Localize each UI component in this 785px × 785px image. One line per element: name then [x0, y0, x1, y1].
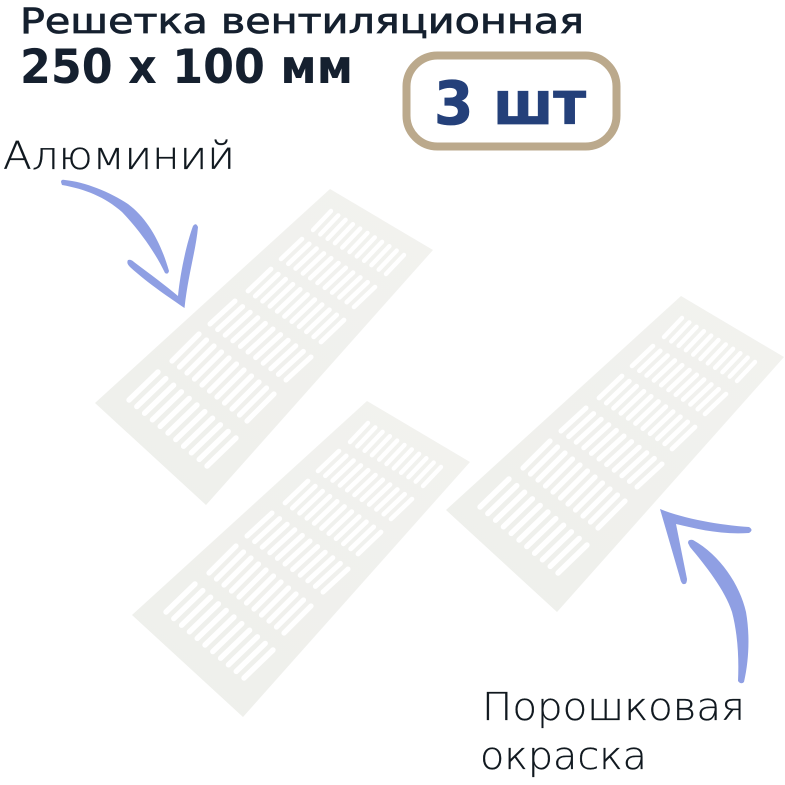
- label: coating second line: окраска: [480, 734, 647, 778]
- badge: quantity: [406, 56, 616, 146]
- grille: left upper: [95, 189, 433, 505]
- label: aluminium: Алюминий: [3, 134, 235, 178]
- label: powder coating: Порошковая: [482, 685, 745, 729]
- arrow: to left grille: [61, 180, 198, 308]
- grille: right: [446, 296, 784, 612]
- title: dimensions: 250 х 100 мм: [20, 40, 353, 95]
- arrow: to right grille: [660, 509, 752, 683]
- badge: quantity: 3 шт: [434, 69, 586, 139]
- title: product name: Решетка вентиляционная: [20, 2, 584, 42]
- grille: centre lower: [132, 401, 470, 717]
